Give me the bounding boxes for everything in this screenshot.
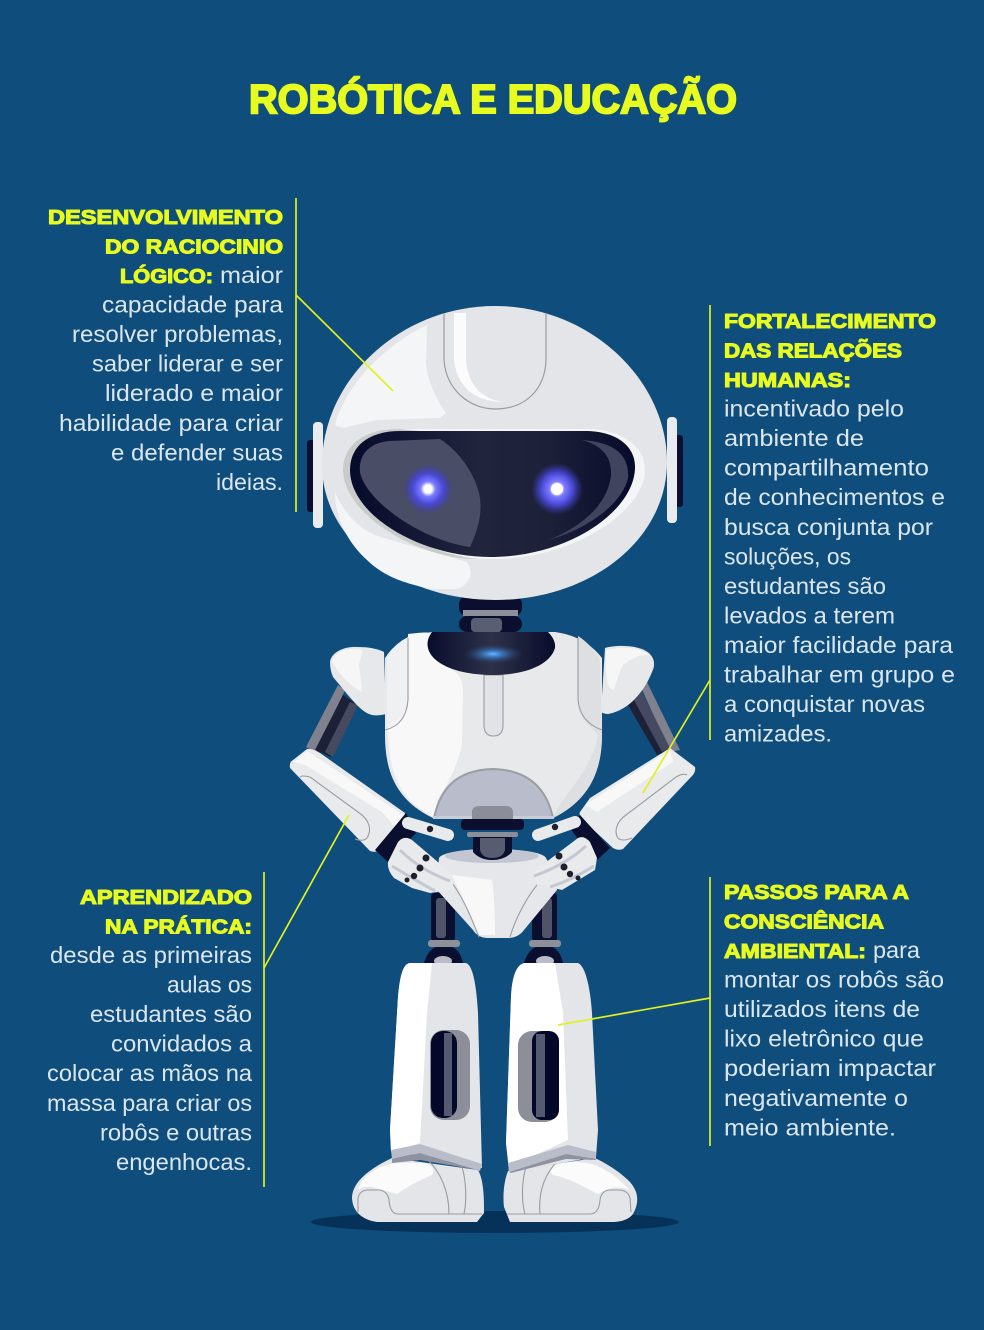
- text block: convidados a: [111, 1031, 253, 1057]
- text block: [48, 206, 284, 495]
- robot illustration: [290, 306, 695, 1233]
- text block: amizades.: [724, 721, 832, 747]
- text block: ideias.: [216, 469, 283, 495]
- text block: engenhocas.: [116, 1149, 252, 1175]
- text block: CONSCIÊNCIA: [724, 910, 884, 934]
- text block: DAS RELAÇÕES: [724, 338, 902, 362]
- left hand: [388, 823, 454, 893]
- text block: maior facilidade para: [724, 632, 954, 658]
- text block: NA PRÁTICA:: [105, 916, 252, 938]
- connector lines: [264, 815, 349, 1187]
- pelvis: [437, 837, 557, 938]
- text block: DESENVOLVIMENTO: [48, 206, 283, 229]
- text block: a conquistar novas: [724, 691, 925, 717]
- text block: FORTALECIMENTO: [724, 310, 936, 333]
- text block: [724, 310, 955, 747]
- text block: HUMANAS:: [724, 369, 851, 392]
- right eye: [531, 463, 583, 515]
- left forearm: [290, 749, 405, 852]
- text block: ambiente de: [724, 425, 864, 451]
- left leg: [390, 963, 482, 1171]
- text block: poderiam impactar: [724, 1055, 936, 1081]
- text block: estudantes são: [724, 573, 886, 599]
- visor: [350, 431, 635, 557]
- text block: compartilhamento: [724, 455, 929, 481]
- right shoulder: [601, 646, 654, 714]
- left foot: [352, 1158, 484, 1222]
- text block: trabalhar em grupo e: [724, 662, 955, 688]
- text block: massa para criar os: [47, 1090, 252, 1116]
- callout: raciocínio lógico: [48, 198, 393, 512]
- connector lines: [643, 305, 710, 793]
- right wrist: [570, 815, 610, 862]
- text block: levados a terem: [724, 602, 895, 628]
- right foot: [503, 1158, 637, 1222]
- pelvis highlight: [452, 875, 495, 935]
- text block: e defender suas: [111, 439, 283, 465]
- text block: montar os robôs são: [724, 967, 944, 993]
- connector lines: [296, 198, 393, 512]
- text block: colocar as mãos na: [47, 1060, 253, 1086]
- title: ROBÓTICA E EDUCAÇÃO: [249, 76, 737, 122]
- text block: PASSOS PARA A: [724, 881, 909, 904]
- text block: meio ambiente.: [724, 1114, 896, 1140]
- waist joint: [461, 806, 524, 837]
- text block: DO RACIOCINIO: [105, 236, 283, 258]
- text block: LÓGICO:: [120, 264, 213, 288]
- chest tab: [484, 675, 503, 736]
- visor rim: [343, 429, 645, 559]
- text block: soluções, os: [724, 543, 851, 569]
- text block: estudantes são: [90, 1001, 252, 1027]
- text block: liderado e maior: [105, 380, 283, 406]
- right arm strut: [628, 682, 680, 755]
- right forearm: [580, 748, 695, 850]
- text block: saber liderar e ser: [92, 351, 283, 377]
- torso: [385, 632, 602, 819]
- text block: desde as primeiras: [50, 942, 252, 968]
- text block: incentivado pelo: [724, 396, 904, 422]
- left arm strut: [306, 685, 358, 757]
- text block: busca conjunta por: [724, 514, 933, 540]
- torso panel lines: [385, 638, 602, 730]
- text block: maior: [220, 262, 283, 288]
- text block: de conhecimentos e: [724, 484, 945, 510]
- callout: consciência ambiental: [558, 877, 944, 1146]
- text block: habilidade para criar: [59, 410, 283, 436]
- text block: AMBIENTAL:: [724, 940, 866, 963]
- left eye: [403, 464, 453, 514]
- left shoulder: [330, 647, 386, 715]
- helmet: [322, 306, 667, 600]
- helmet top stripe: [444, 313, 546, 409]
- left wrist: [375, 813, 416, 862]
- text block: negativamente o: [724, 1085, 908, 1111]
- text block: lixo eletrônico que: [724, 1026, 924, 1052]
- right thumb: [538, 822, 575, 835]
- collar: [428, 632, 555, 675]
- torso highlight: [387, 632, 463, 817]
- leg joints: [424, 893, 563, 966]
- left lens reflection: [360, 439, 481, 547]
- helmet highlight upper: [335, 325, 446, 428]
- text block: aulas os: [167, 972, 252, 998]
- text block: [47, 886, 253, 1175]
- text block: para: [873, 937, 921, 963]
- left ear: [307, 422, 323, 528]
- text block: robôs e outras: [100, 1119, 252, 1145]
- right leg: [506, 963, 598, 1173]
- right leg window: [518, 1031, 559, 1122]
- left thumb: [408, 823, 448, 835]
- ground shadow: [311, 1211, 679, 1233]
- right hand: [533, 822, 597, 890]
- right lens reflection: [548, 440, 628, 540]
- helmet highlight lower: [335, 492, 471, 589]
- right ear: [667, 417, 683, 523]
- connector lines: [558, 877, 710, 1146]
- neck: [459, 596, 522, 632]
- belly arch: [434, 769, 553, 818]
- text block: utilizados itens de: [724, 996, 920, 1022]
- text block: resolver problemas,: [72, 321, 283, 347]
- left leg window: [430, 1030, 470, 1120]
- text block: capacidade para: [102, 292, 284, 318]
- head: [307, 306, 683, 600]
- callout: aprendizado na prática: [47, 815, 349, 1187]
- text block: APRENDIZADO: [80, 886, 252, 909]
- text block: [724, 881, 944, 1140]
- callout: relações humanas: [643, 305, 955, 793]
